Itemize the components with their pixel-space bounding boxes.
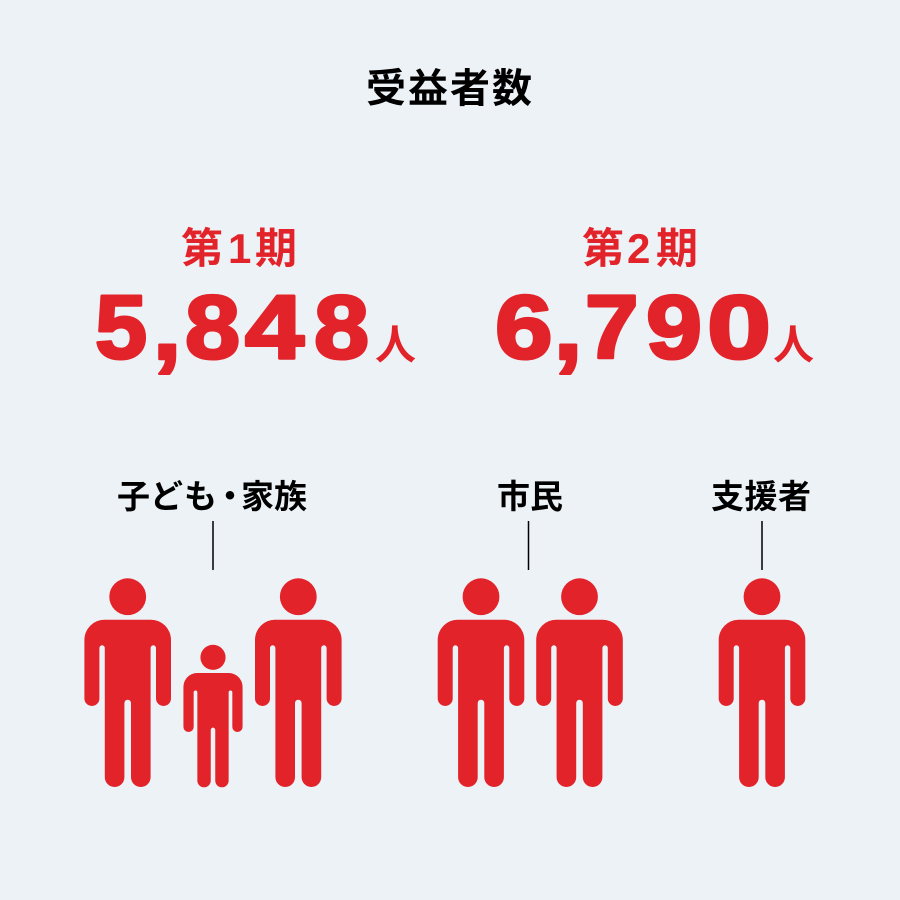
icon: adult right [255,578,342,787]
period 1 number: 8 [314,277,369,378]
period 2 number: , [553,272,583,380]
connector line: citizens [528,521,530,570]
period 2 number: 6 [495,276,553,377]
period 2 number: 9 [646,278,702,378]
connector line: supporters [761,521,763,570]
icon: citizen 2 [536,578,623,787]
period 1 number [95,272,369,380]
period 1 label: 第1期 [181,225,297,272]
label: citizens: 市民 [497,478,563,515]
period 1 number: , [152,272,182,380]
period 1 number: 5 [95,278,147,378]
period 1 number: 4 [245,277,304,377]
icon: child [183,645,243,787]
period 1 number: 8 [185,277,240,378]
period 2 block [495,225,814,380]
icon: supporter [719,578,805,787]
icon: citizen 1 [438,578,524,787]
period 2 label: 第2期 [582,225,698,272]
title: 受益者数 [366,67,532,111]
period 1 unit: 人 [375,322,416,368]
period 2 number: 7 [585,277,639,377]
period 2 number: 0 [707,276,771,377]
label: supporters: 支援者 [711,478,811,515]
icon: adult left [84,578,171,787]
period 1 block [95,225,416,380]
period 2 number [495,272,771,380]
connector line: children and families [212,521,214,570]
period 2 unit: 人 [773,322,814,368]
label: children and families: 子ども・家族 [117,478,307,515]
